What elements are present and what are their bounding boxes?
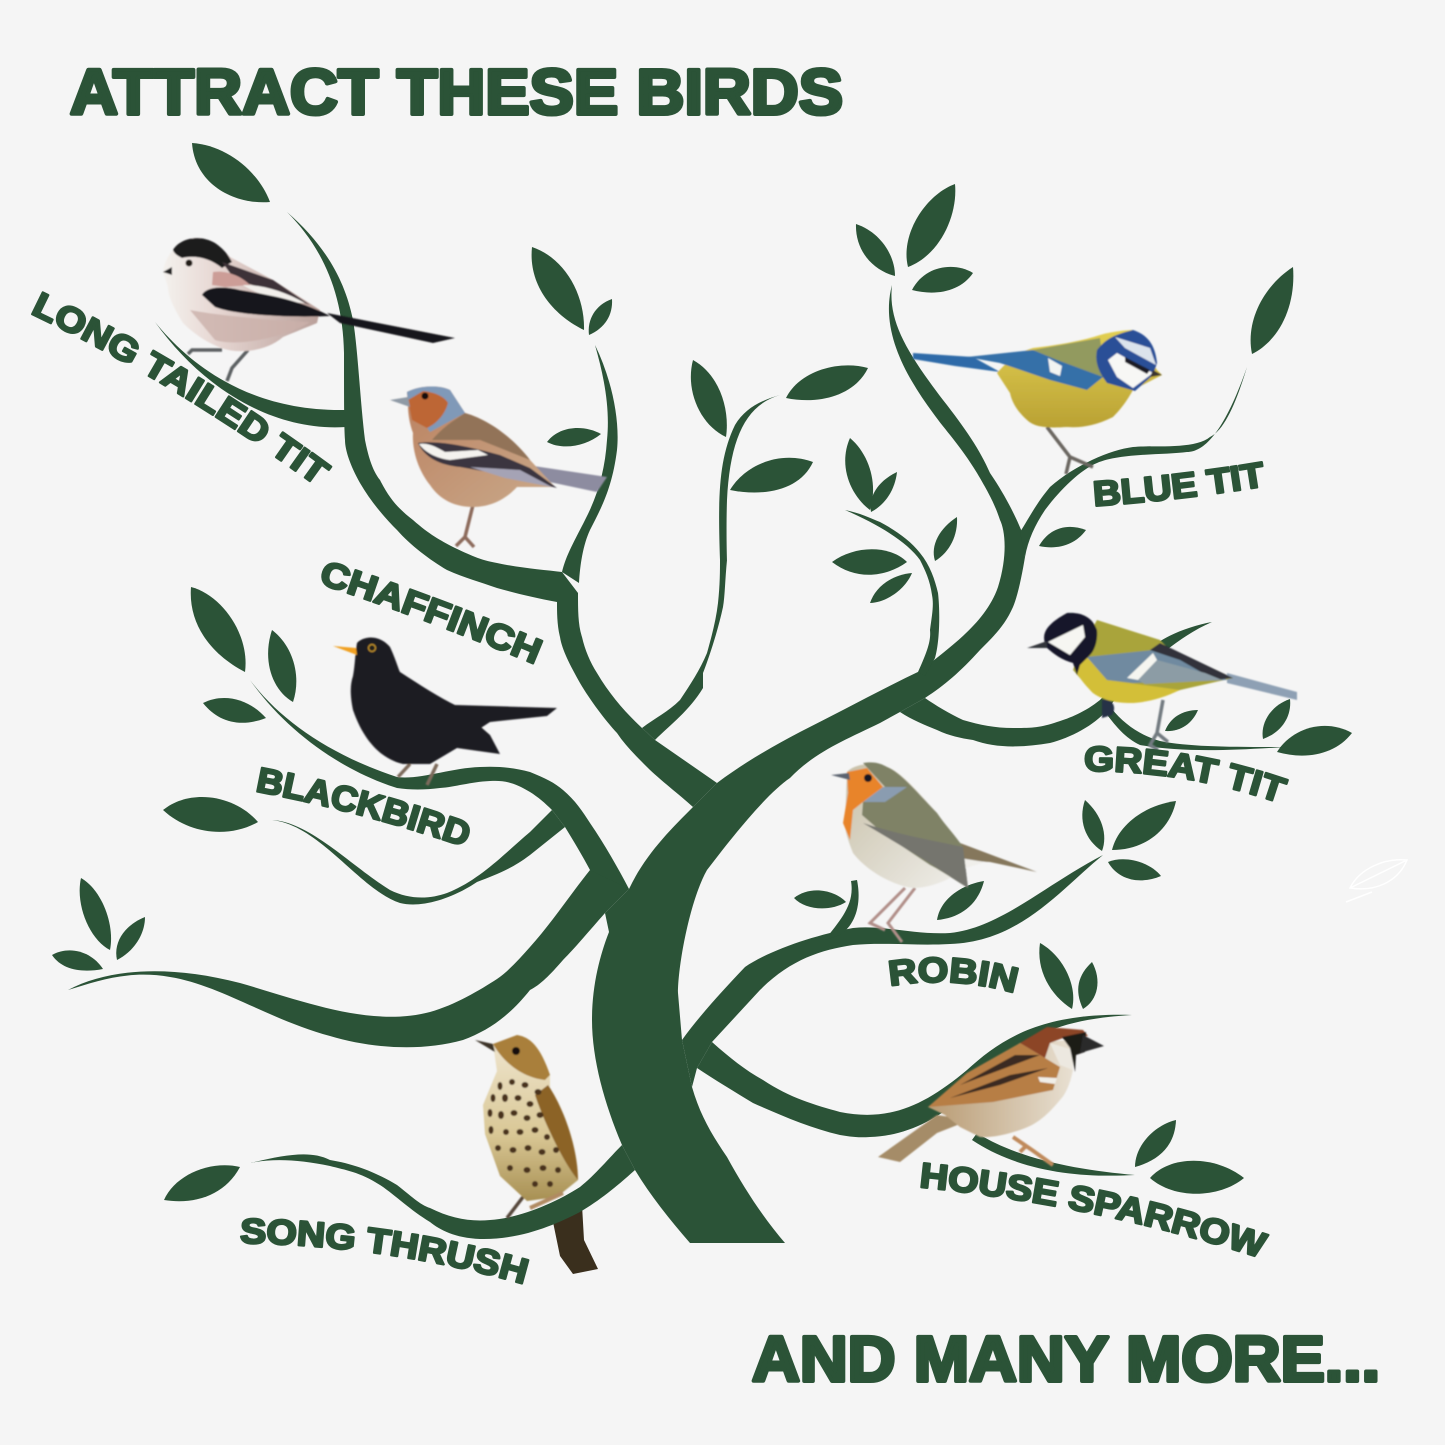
robin branch — [682, 855, 1103, 1087]
label: blue tit: BLUE TIT — [1093, 461, 1264, 507]
sparrow lower twig — [972, 1133, 1135, 1176]
bird: chaffinch — [390, 386, 607, 547]
blue tit branch — [1020, 367, 1247, 557]
bird: song thrush — [475, 1035, 578, 1218]
second left branch — [272, 810, 565, 904]
leaves — [52, 143, 1352, 1201]
trunk and upper right branch — [592, 285, 1025, 1243]
bird: robin — [831, 762, 1037, 942]
label: great tit: GREAT TIT — [1084, 745, 1289, 802]
label: blackbird: BLACKBIRD — [256, 766, 470, 845]
sparrow branch — [697, 1015, 1132, 1137]
chaffinch branch — [562, 345, 618, 583]
label: chaffinch: CHAFFINCH — [321, 562, 544, 664]
bird: house sparrow — [878, 1027, 1104, 1165]
closing text: AND MANY MORE... — [752, 1323, 1380, 1395]
long tailed tit branch — [155, 322, 346, 427]
label: house sparrow: HOUSE SPARROW — [920, 1162, 1270, 1258]
bird tail: song thrush — [553, 1205, 598, 1274]
song thrush branch — [250, 1145, 635, 1239]
third left branch — [68, 870, 629, 1047]
middle branch — [642, 395, 780, 740]
upper left branch — [287, 212, 717, 807]
great tit lower twig — [1108, 708, 1285, 750]
faint leaf mark — [1346, 860, 1407, 902]
bird: blue tit — [913, 330, 1162, 474]
tree — [68, 212, 1285, 1243]
title: ATTRACT THESE BIRDS — [70, 56, 843, 128]
label: robin: ROBIN — [888, 956, 1019, 994]
bird: blackbird — [333, 638, 557, 785]
bird: long tailed tit — [163, 238, 455, 381]
small inner branch — [845, 510, 939, 676]
label: long tailed tit: LONG TAILED TIT — [31, 291, 332, 482]
label: song thrush: SONG THRUSH — [240, 1218, 530, 1285]
robin stub — [825, 880, 859, 940]
great tit branch — [900, 622, 1212, 746]
bird: great tit — [1027, 613, 1297, 750]
blackbird branch — [250, 680, 629, 905]
